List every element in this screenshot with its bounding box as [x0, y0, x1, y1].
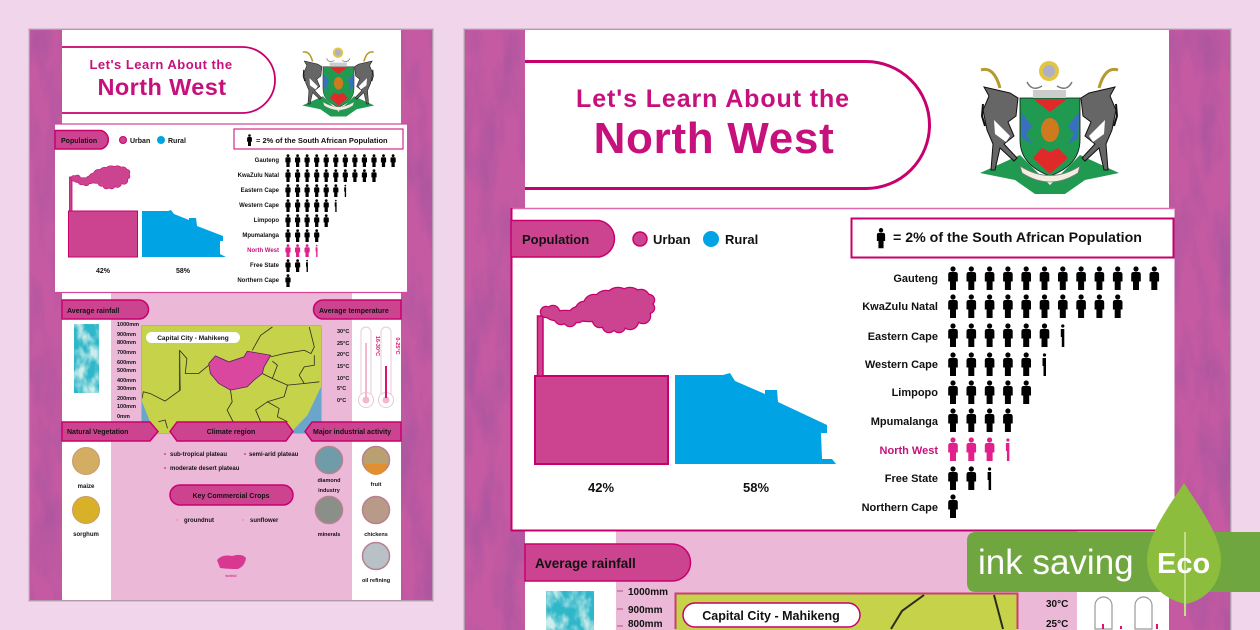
industry items: industry [318, 488, 341, 494]
province labels: Gauteng [893, 273, 938, 285]
title [576, 85, 850, 163]
capital city label [683, 603, 860, 627]
rainfall scale: 700mm [117, 350, 136, 356]
crops list: sunflower [250, 518, 279, 524]
rainfall scale: 100mm [117, 404, 136, 410]
factory bar [535, 288, 668, 464]
province labels: KwaZulu Natal [238, 173, 279, 179]
legend [633, 231, 758, 247]
province labels: Northern Cape [862, 502, 938, 514]
rainfall scale: 0mm [117, 414, 130, 420]
province labels [862, 273, 939, 514]
thermometers: 0-25°C [394, 337, 400, 355]
temperature scale: 25°C [1046, 619, 1068, 630]
rainfall heading [62, 300, 148, 319]
rainfall scale: 800mm [117, 340, 136, 346]
crops list: groundnut [184, 518, 214, 524]
province labels [237, 158, 280, 284]
icon: coat of arms [302, 48, 374, 116]
province labels: Limpopo [892, 387, 938, 399]
province labels: Eastern Cape [241, 188, 280, 194]
province labels: North West [247, 248, 279, 254]
industry items [316, 446, 390, 584]
rainfall scale: 800mm [628, 619, 663, 630]
province labels: Gauteng [255, 158, 279, 164]
industry items: oil refining [362, 578, 390, 584]
temperature scale: 5°C [337, 386, 346, 392]
legend: Urban [653, 232, 691, 247]
climate region heading: Climate region [207, 429, 255, 436]
pictogram key [234, 129, 403, 149]
thermometers [1095, 597, 1157, 629]
temperature heading [314, 300, 401, 319]
rainfall scale: 400mm [117, 378, 136, 384]
leaf icon [1147, 483, 1221, 616]
title: North West [594, 114, 834, 163]
key commercial crops heading [170, 485, 293, 505]
temperature scale: 30°C [1046, 599, 1068, 610]
population heading [511, 220, 614, 257]
capital city label: Capital City - Mahikeng [702, 609, 840, 623]
rainfall scale: 300mm [117, 386, 136, 392]
major industrial activity heading [305, 422, 401, 441]
icon: coat of arms [980, 61, 1119, 194]
factory bar [68, 166, 138, 257]
climate region heading [170, 422, 293, 441]
rainfall scale [117, 322, 139, 420]
rainfall heading [525, 544, 690, 581]
province labels: Free State [885, 473, 938, 485]
natural vegetation heading: Natural Vegetation [67, 429, 128, 436]
temperature scale: 30°C [337, 329, 349, 335]
eco badge [967, 483, 1260, 616]
rainfall scale: 600mm [117, 360, 136, 366]
pictogram rows [948, 266, 1159, 518]
rainfall heading: Average rainfall [67, 308, 119, 315]
capital city label: Capital City - Mahikeng [157, 335, 229, 342]
major industrial activity heading: Major industrial activity [313, 429, 391, 436]
province labels: Northern Cape [237, 278, 280, 284]
province labels: Mpumalanga [242, 233, 280, 239]
province labels: Western Cape [865, 359, 938, 371]
temperature scale: 25°C [337, 341, 349, 347]
temperature scale: 10°C [337, 376, 349, 382]
rainfall scale: 900mm [117, 332, 136, 338]
house bar [675, 373, 836, 464]
province labels: Western Cape [239, 203, 280, 209]
rainfall gauge [74, 324, 99, 393]
vegetation items: maize [78, 484, 95, 490]
climate list [164, 452, 299, 472]
climate list: semi-arid plateau [249, 452, 299, 458]
industry items: minerals [318, 532, 340, 538]
temperature scale: 15°C [337, 364, 349, 370]
temperature scale: 20°C [337, 352, 349, 358]
vegetation items [72, 448, 100, 538]
rural value: 58% [743, 480, 769, 495]
urban value: 42% [588, 480, 614, 495]
province labels: Eastern Cape [868, 331, 938, 343]
population heading [55, 130, 108, 149]
rainfall scale: 1000mm [117, 322, 139, 328]
title pill [525, 62, 930, 188]
right poster side strips [465, 30, 1230, 630]
crops list [176, 518, 279, 524]
rainfall gauge [546, 591, 594, 630]
title pill: Let's Learn About the [89, 57, 233, 72]
industry items: diamond [318, 478, 340, 484]
rainfall scale: 900mm [628, 605, 663, 616]
rural value: 58% [176, 268, 191, 275]
climate list: sub-tropical plateau [170, 452, 227, 458]
urban value: 42% [96, 268, 111, 275]
vegetation items: sorghum [73, 532, 99, 538]
natural vegetation heading [62, 422, 158, 441]
logo [217, 555, 246, 578]
province labels: Mpumalanga [871, 416, 939, 428]
province labels: Limpopo [254, 218, 279, 224]
province labels: Free State [250, 263, 280, 269]
title pill [62, 47, 275, 113]
rainfall scale: 200mm [117, 396, 136, 402]
legend: Urban [130, 138, 150, 145]
pictogram key: = 2% of the South African Population [893, 230, 1142, 246]
panel: right poster [463, 28, 1232, 630]
population heading: Population [522, 232, 589, 247]
title: Let's Learn About the [576, 85, 850, 113]
capital city label [146, 332, 240, 343]
thermometers: 16-30°C [374, 336, 380, 356]
legend: Rural [168, 138, 186, 145]
panel: population [511, 208, 1174, 531]
thermometers [358, 327, 400, 408]
map [675, 593, 1018, 630]
legend: Rural [725, 232, 758, 247]
rainfall scale: 500mm [117, 368, 136, 374]
house bar [142, 210, 226, 257]
pictogram key: = 2% of the South African Population [256, 136, 388, 145]
panel: left poster [28, 28, 434, 602]
logo: twinkl [225, 573, 237, 578]
map [142, 326, 321, 433]
temperature scale [1046, 599, 1068, 630]
rainfall scale [617, 587, 668, 630]
pictogram key [852, 218, 1174, 258]
eco badge: Eco [1157, 548, 1210, 580]
industry items: fruit [371, 482, 382, 488]
temperature heading: Average temperature [319, 308, 389, 315]
temperature scale [337, 329, 349, 404]
rainfall scale: 1000mm [628, 587, 668, 598]
panel: population [55, 124, 407, 293]
pictogram rows [285, 154, 396, 287]
rainfall heading: Average rainfall [535, 556, 636, 571]
climate list: moderate desert plateau [170, 466, 240, 472]
industry items: chickens [364, 532, 388, 538]
province labels: North West [880, 445, 938, 457]
left poster side strips [30, 30, 432, 600]
eco label: ink saving [978, 543, 1134, 582]
temperature scale: 0°C [337, 398, 346, 404]
key commercial crops heading: Key Commercial Crops [192, 493, 270, 500]
legend [120, 136, 186, 145]
province labels: KwaZulu Natal [862, 301, 938, 313]
title pill: North West [98, 74, 226, 100]
population heading: Population [61, 138, 97, 145]
